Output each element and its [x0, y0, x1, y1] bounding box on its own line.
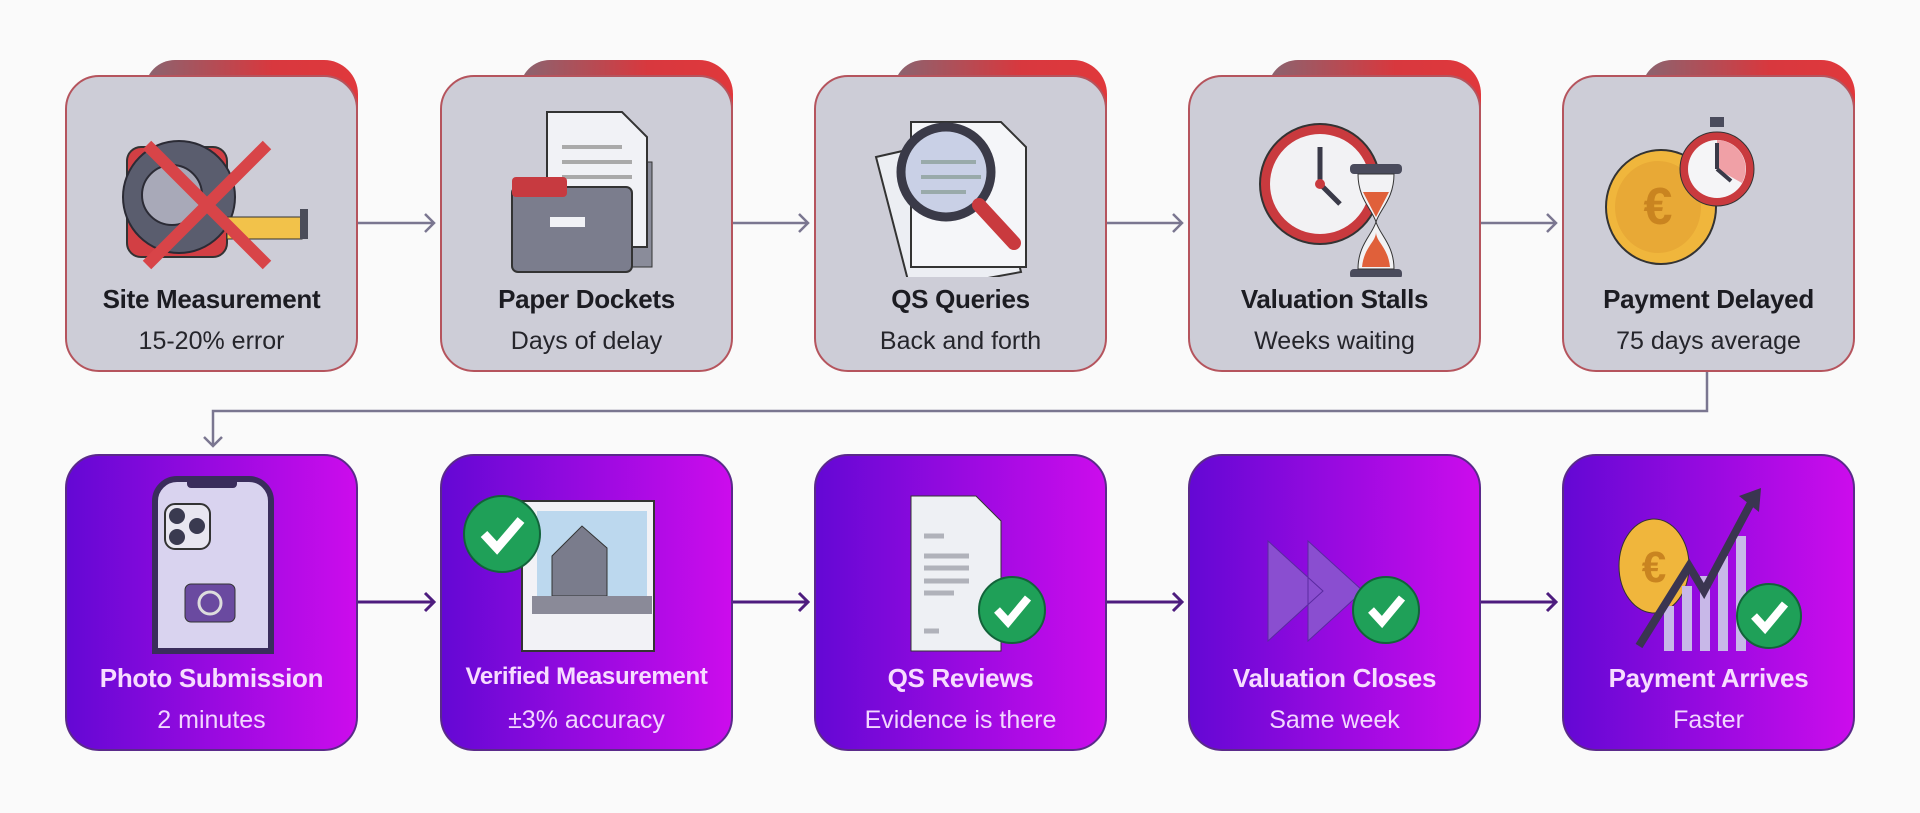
- subtitle: Evidence is there: [865, 706, 1056, 734]
- icon: document with check: [910, 496, 1046, 652]
- subtitle: Same week: [1269, 706, 1400, 734]
- title: Payment Arrives: [1609, 663, 1808, 693]
- icon: folder with papers: [511, 111, 652, 273]
- subtitle: 2 minutes: [157, 706, 266, 734]
- icon: euro coin with growth chart: [1618, 488, 1802, 651]
- title: Site Measurement: [103, 284, 320, 314]
- icon: euro coin and stopwatch: [1605, 117, 1754, 265]
- panel: valuation closes: [1188, 454, 1481, 751]
- panel: verified measurement: [440, 454, 733, 751]
- panel: photo submission: [65, 454, 358, 751]
- title: Paper Dockets: [498, 284, 675, 314]
- subtitle: Back and forth: [880, 327, 1041, 355]
- panel: site measurement: [65, 75, 358, 372]
- subtitle: 15-20% error: [139, 327, 284, 355]
- icon: euro coin with growth chart: €: [1642, 543, 1666, 592]
- icon: euro coin and stopwatch: €: [1644, 178, 1672, 236]
- panel: valuation stalls: [1188, 75, 1481, 372]
- icon: clock and hourglass: [1259, 123, 1402, 277]
- panel: QS queries: [814, 75, 1107, 372]
- icon: blueprint with check: [463, 495, 655, 652]
- icon: tape measure crossed: [122, 140, 308, 270]
- panel: payment arrives: [1562, 454, 1855, 751]
- icon: phone with camera: [152, 476, 274, 654]
- title: Valuation Stalls: [1241, 284, 1428, 314]
- panel: paper dockets: [440, 75, 733, 372]
- subtitle: ±3% accuracy: [508, 706, 665, 734]
- icon: magnifier over papers: [874, 121, 1027, 277]
- title: Photo Submission: [100, 663, 323, 693]
- subtitle: Days of delay: [511, 327, 662, 355]
- title: QS Reviews: [888, 663, 1033, 693]
- title: Valuation Closes: [1233, 663, 1436, 693]
- panel: QS reviews: [814, 454, 1107, 751]
- title: QS Queries: [891, 284, 1030, 314]
- panel: payment delayed: [1562, 75, 1855, 372]
- subtitle: 75 days average: [1616, 327, 1801, 355]
- subtitle: Faster: [1673, 706, 1744, 734]
- title: Verified Measurement: [465, 663, 708, 690]
- subtitle: Weeks waiting: [1254, 327, 1415, 355]
- icon: fast forward with check: [1268, 540, 1420, 644]
- tabs: [145, 60, 358, 140]
- title: Payment Delayed: [1603, 284, 1814, 314]
